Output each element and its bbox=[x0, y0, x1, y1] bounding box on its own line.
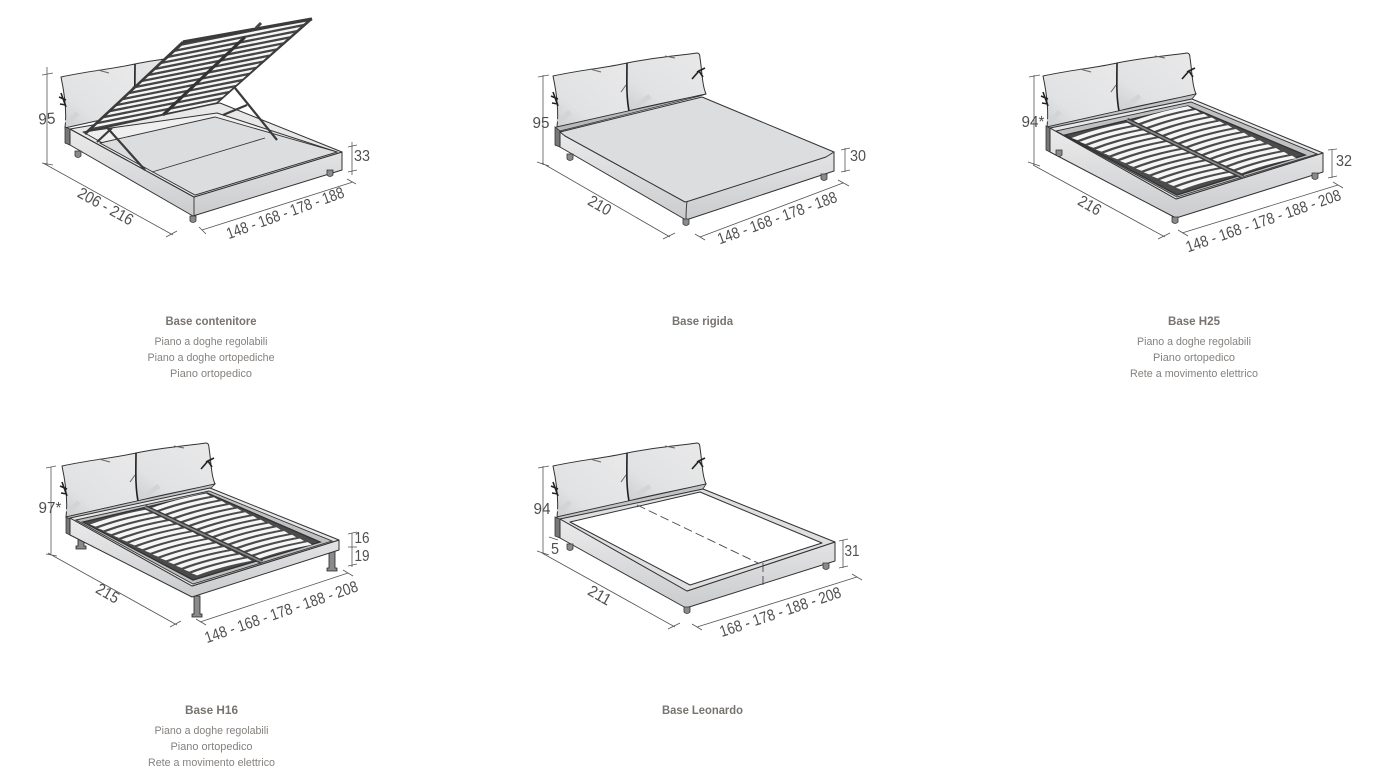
panel: Base rigida bbox=[532, 53, 866, 248]
dimension: 168 - 208: 168 - 178 - 188 - 208 bbox=[718, 584, 844, 641]
dimension: 19: 19 bbox=[354, 548, 370, 565]
bed base top with storage compartment bbox=[70, 103, 342, 197]
caption: Base H25: Piano ortopedico bbox=[1153, 352, 1235, 364]
headboard post bbox=[66, 517, 70, 535]
dimension: 30: 30 bbox=[850, 148, 866, 165]
headboard post bbox=[555, 517, 560, 538]
bed base top bbox=[70, 488, 339, 586]
caption: Base H16: Rete a movimento elettrico bbox=[148, 757, 275, 769]
bed base top bbox=[1050, 99, 1323, 199]
feet bbox=[567, 544, 829, 614]
headboard post bbox=[1046, 126, 1050, 152]
back wall of compartment bbox=[83, 113, 337, 195]
caption: Base H16: Piano ortopedico bbox=[170, 741, 252, 753]
panel: Base H25 bbox=[1022, 53, 1352, 256]
bed base sides bbox=[560, 519, 835, 608]
icon: headboard pillows bbox=[551, 53, 706, 127]
dimension: 148 - 208: 148 - 168 - 178 - 188 - 208 bbox=[203, 578, 360, 647]
bed base sides bbox=[1050, 128, 1323, 218]
dimension lines bbox=[537, 75, 850, 240]
dimension: 31: 31 bbox=[844, 543, 860, 560]
caption: Base contenitore bbox=[148, 314, 274, 380]
storage floor bbox=[100, 117, 337, 195]
caption: Base H16: Piano a doghe regolabili bbox=[154, 725, 268, 737]
headboard strip bbox=[1047, 94, 1196, 150]
bed base sides bbox=[70, 518, 339, 597]
headboard strip bbox=[556, 94, 706, 146]
dimension: 148 - 188: 148 - 168 - 178 - 188 bbox=[224, 185, 347, 243]
caption: Base H25: Rete a movimento elettrico bbox=[1130, 368, 1258, 380]
dimension: 148 - 188: 148 - 168 - 178 - 188 bbox=[715, 189, 840, 248]
slatted frame bbox=[83, 493, 320, 580]
panel: Base contenitore bbox=[38, 19, 370, 243]
lift struts bbox=[97, 88, 277, 170]
headboard post bbox=[65, 127, 70, 145]
icon: headboard pillows bbox=[551, 443, 706, 517]
frame rail bbox=[1056, 102, 1317, 197]
legs bbox=[76, 535, 337, 617]
caption: Base Leonardo: Base Leonardo bbox=[662, 703, 743, 717]
caption: Base contenitore: Piano a doghe regolabili bbox=[154, 336, 268, 348]
dimension lines bbox=[1028, 75, 1343, 239]
dimension: 206 - 216: 206 - 216 bbox=[74, 185, 136, 229]
dimension: 95: 95 bbox=[532, 115, 550, 132]
caption: Base contenitore: Base contenitore bbox=[166, 314, 257, 328]
feet bbox=[75, 151, 333, 222]
dimension: 94: 94 bbox=[534, 501, 551, 518]
frame rail bbox=[76, 491, 332, 584]
dimension lines bbox=[537, 466, 862, 630]
feet bbox=[1056, 150, 1318, 224]
dimension: 5: 5 bbox=[551, 541, 559, 558]
caption: Base H16: Base H16 bbox=[185, 703, 238, 717]
dashed seam bbox=[637, 505, 763, 585]
dimension: 210: 210 bbox=[585, 193, 614, 220]
panel: Base Leonardo bbox=[534, 443, 862, 641]
floor seams bbox=[152, 138, 265, 216]
dimension: 211: 211 bbox=[585, 583, 614, 610]
lifted slatted lid bbox=[85, 19, 312, 134]
caption: Base H25: Base H25 bbox=[1168, 314, 1220, 328]
bed base top frame bbox=[560, 489, 835, 591]
bed base sides bbox=[70, 129, 342, 216]
mattress top bbox=[560, 97, 834, 202]
icon: headboard pillows bbox=[1041, 53, 1196, 127]
dimension: 215: 215 bbox=[93, 581, 122, 608]
dimension: 148 - 208: 148 - 168 - 178 - 188 - 208 bbox=[1184, 187, 1343, 256]
headboard strip bbox=[557, 484, 706, 538]
caption: Base H16 bbox=[148, 703, 275, 769]
icon: headboard pillows bbox=[60, 443, 215, 517]
headboard post bbox=[555, 127, 560, 147]
dimension: 95: 95 bbox=[38, 110, 56, 129]
dimension: 216: 216 bbox=[1075, 193, 1104, 220]
dimension: 16: 16 bbox=[354, 530, 370, 547]
dimension: 32: 32 bbox=[1336, 153, 1352, 170]
panel: Base H16 bbox=[38, 443, 370, 647]
bed base sides bbox=[560, 131, 834, 220]
white inner panel bbox=[570, 492, 822, 585]
feet bbox=[567, 154, 827, 226]
caption: Base H25 bbox=[1130, 314, 1258, 380]
caption: Base rigida: Base rigida bbox=[672, 314, 733, 328]
headboard strip bbox=[66, 484, 215, 535]
caption: Base H25: Piano a doghe regolabili bbox=[1137, 336, 1251, 348]
dimension lines bbox=[42, 67, 357, 237]
slatted frame bbox=[1065, 106, 1305, 195]
caption: Base contenitore: Piano ortopedico bbox=[170, 368, 252, 380]
icon: headboard pillows bbox=[59, 54, 214, 128]
mattress corner line bbox=[686, 202, 687, 220]
dimension: 94*: 94* bbox=[1022, 114, 1044, 131]
dimension: 33: 33 bbox=[354, 148, 370, 165]
caption: Base contenitore: Piano a doghe ortopediche bbox=[148, 352, 274, 364]
dimension lines bbox=[46, 466, 357, 627]
dimension: 97*: 97* bbox=[38, 500, 62, 517]
